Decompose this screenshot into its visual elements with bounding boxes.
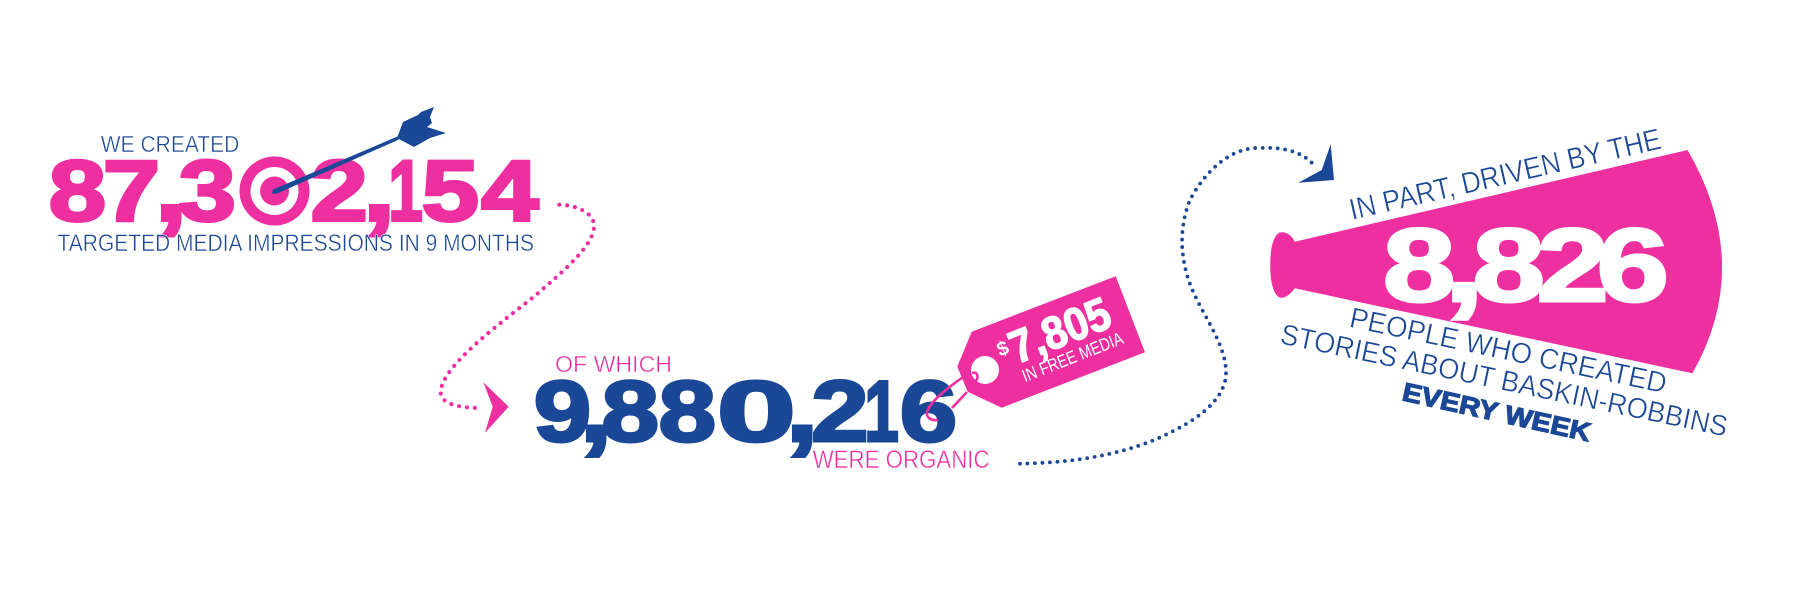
big number: 9,880,216: 8 — [602, 364, 659, 460]
text: were organic: WERE ORGANIC — [813, 446, 990, 474]
icon: target replacing the zero — [240, 156, 310, 226]
big number: 87,302,154: 4 — [481, 144, 539, 240]
big number: 8,826: , — [1444, 195, 1485, 327]
big number: 87,302,154: 2 — [311, 144, 368, 240]
text: tag amount: 7,805 — [1001, 287, 1118, 374]
big number: 9,880,216: 2 — [811, 364, 869, 460]
big number: 87,302,154: 7 — [103, 144, 160, 240]
big number: 8,826: 8 — [1383, 206, 1455, 323]
text: people who created: PEOPLE WHO CREATED — [1347, 302, 1670, 400]
big number: 9,880,216: 0 — [717, 363, 796, 459]
big number: 87,302,154: 1 — [388, 142, 423, 239]
icon: megaphone — [1270, 150, 1722, 373]
big number: 9,880,216: , — [579, 351, 613, 463]
big number: 87,302,154: , — [362, 131, 396, 242]
text: we created: WE CREATED — [101, 131, 239, 157]
arrow: blue dotted connector — [1020, 144, 1334, 464]
big number: 87,302,154: 0 — [243, 144, 300, 240]
panel: third stat, people creating stories — [1270, 123, 1730, 447]
icon: arrow in target — [272, 107, 446, 194]
big number: 87,302,154: 3 — [179, 144, 236, 240]
panel: first stat, media impressions — [49, 107, 539, 257]
big number: 9,880,216: 6 — [900, 364, 957, 460]
panel: second stat, organic impressions — [534, 276, 1145, 474]
arrow: pink dotted connector — [441, 205, 594, 433]
text: every week: EVERY WEEK — [1400, 377, 1594, 447]
text: targeted media impressions: TARGETED MEDIA IMPRESSIONS IN 9 MONTHS — [58, 230, 534, 257]
big number: 8,826: 6 — [1597, 206, 1669, 323]
text: tag amount: $ — [994, 337, 1012, 361]
big number: 9,880,216 — [534, 351, 957, 463]
big number: 9,880,216: , — [785, 351, 819, 463]
text: tag amount: IN FREE MEDIA — [1019, 328, 1126, 386]
big number: 8,826: 2 — [1536, 206, 1609, 323]
text: stories about baskin-robbins: STORIES ABOUT BASKIN-ROBBINS — [1278, 319, 1730, 443]
big number: 87,302,154: , — [154, 131, 188, 242]
big number: 8,826: 8 — [1473, 206, 1545, 323]
big number: 87,302,154: 5 — [422, 144, 479, 240]
text: of which: OF WHICH — [555, 351, 672, 377]
big number: 87,302,154 — [49, 131, 539, 242]
icon: price tag — [927, 276, 1145, 420]
big number: 9,880,216: 9 — [534, 364, 591, 460]
big number: 9,880,216: 1 — [864, 363, 899, 459]
big number: 9,880,216: 8 — [659, 364, 716, 460]
big number: 87,302,154: 8 — [49, 144, 106, 240]
text: in part, driven by the: IN PART, DRIVEN BY THE — [1346, 123, 1664, 227]
